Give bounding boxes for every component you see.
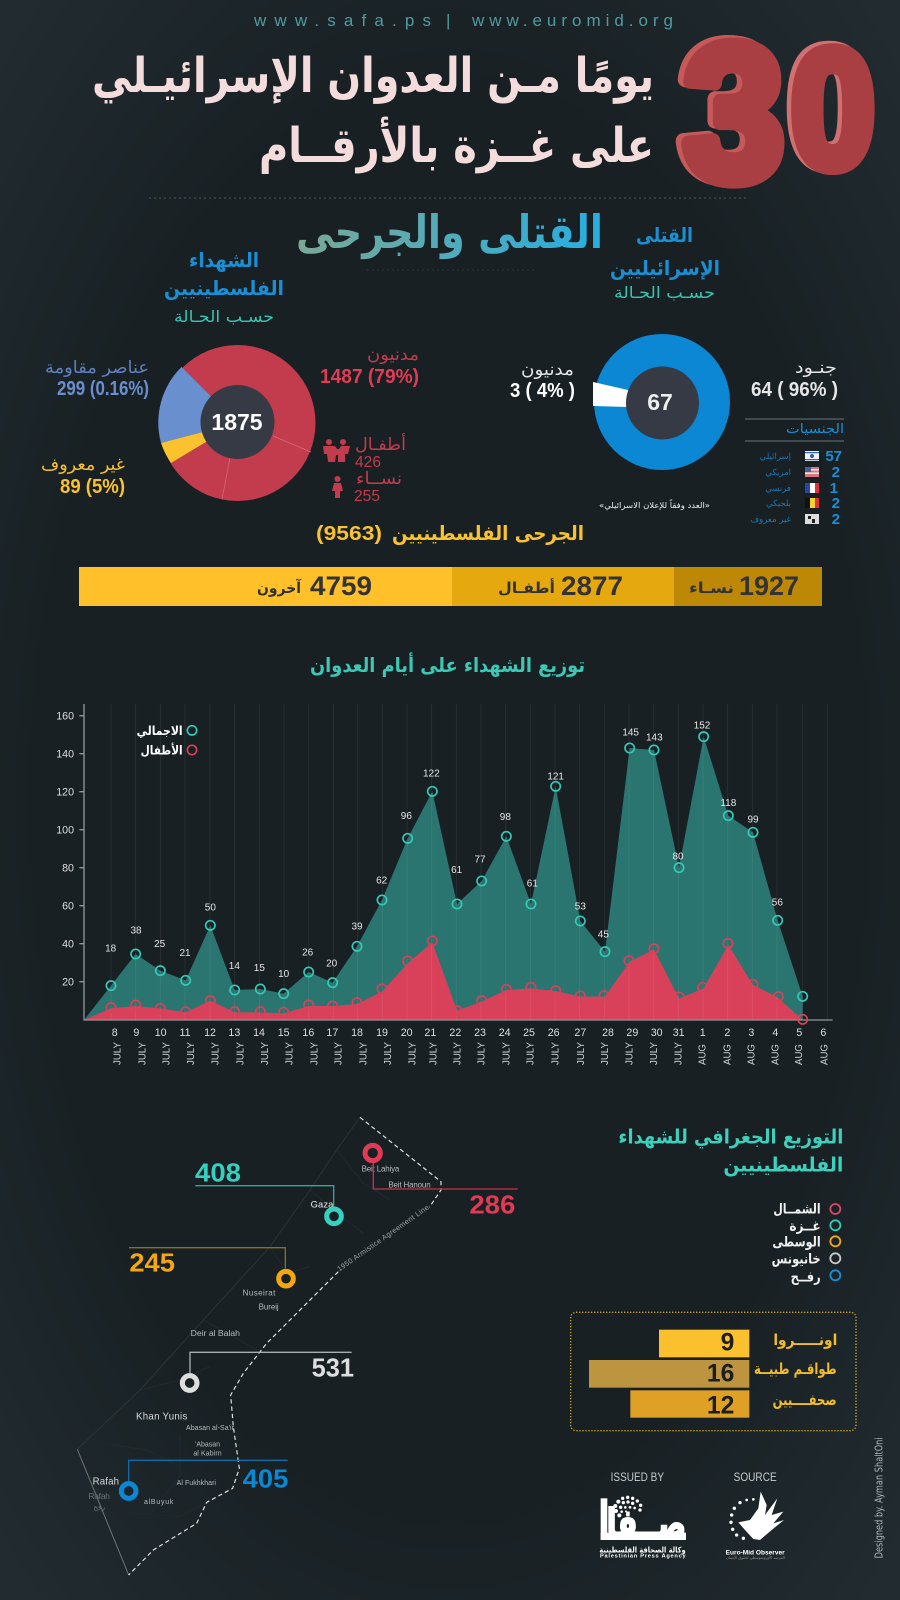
map place names: Beit Hanoun xyxy=(388,1180,431,1189)
map legend: رفــح xyxy=(791,1270,821,1286)
map section heading: الفلسطينيين xyxy=(723,1153,843,1177)
map section heading: التوزيع الجغرافي للشهداء xyxy=(618,1124,843,1149)
panel: UNRWA, medics, journalists: صحفــــيين xyxy=(773,1391,837,1409)
x axis day labels: 23 xyxy=(474,1027,486,1039)
map legend: الوسطى xyxy=(772,1235,821,1251)
label: soldiers xyxy=(751,358,838,401)
x axis day labels: 22 xyxy=(449,1027,461,1039)
label: civilians: 3 ( 4% ) xyxy=(510,380,575,402)
x axis month labels: AUG xyxy=(820,1044,831,1065)
value labels: 56 xyxy=(772,898,783,909)
value labels: 77 xyxy=(474,854,486,865)
value labels: 15 xyxy=(254,963,265,974)
x axis day labels: 18 xyxy=(351,1027,363,1039)
panel: UNRWA, medics, journalists: طواقـم طبيــة xyxy=(754,1360,837,1378)
nationalities table: 2 xyxy=(832,464,840,481)
nationalities table: الجنسيات xyxy=(786,422,844,437)
y axis labels: 80 xyxy=(62,863,74,875)
stacked bar: wounded: 2877 xyxy=(561,571,623,601)
heading: Palestinian martyrs: الفلسطينيين xyxy=(164,276,284,300)
value labels xyxy=(105,720,783,980)
marker: Gaza xyxy=(195,1158,341,1224)
y axis labels: 160 xyxy=(56,711,74,723)
panel: UNRWA, medics, journalists: 12 xyxy=(707,1392,734,1419)
x axis day labels: 19 xyxy=(376,1027,388,1039)
right column xyxy=(571,1124,885,1561)
label: civilians: 1487 (79%) xyxy=(320,366,419,388)
x axis month labels: JULY xyxy=(211,1042,222,1065)
note: per Israeli announcement: «العدد وفقاً للإعلان الاسرائيلي» xyxy=(599,499,710,511)
x axis day labels: 1 xyxy=(700,1027,706,1039)
total area xyxy=(84,737,803,1020)
logo: Safa: Palestinian Press Agency xyxy=(600,1554,687,1560)
nationalities table: فرنسي xyxy=(765,484,791,494)
map place names: alBuyuk xyxy=(144,1499,174,1506)
label: resistance: 299 (0.16%) xyxy=(57,378,149,400)
icon: Israel flag xyxy=(805,451,819,461)
x axis month labels: JULY xyxy=(526,1042,537,1065)
x axis month labels: JULY xyxy=(334,1042,345,1065)
x axis day labels: 9 xyxy=(133,1027,139,1039)
map place names: Abasan al-Sa'ir xyxy=(186,1425,235,1432)
marker: Khan Yunis xyxy=(182,1352,354,1390)
designer credit: Designed by. Ayman ShaltOni xyxy=(872,1437,885,1558)
big number 30: 0 xyxy=(787,13,871,201)
x axis day labels xyxy=(112,1027,826,1039)
map legend: الشمــال xyxy=(773,1201,821,1217)
x axis day labels: 10 xyxy=(155,1027,167,1039)
value labels: 14 xyxy=(229,961,240,972)
x axis month labels: JULY xyxy=(673,1042,684,1065)
logo: Safa: وكالة الصحافة الفلسطينية xyxy=(599,1546,686,1555)
x axis day labels: 20 xyxy=(401,1027,413,1039)
map place names: رفح xyxy=(93,1502,105,1511)
x axis day labels: 6 xyxy=(820,1027,826,1039)
axes xyxy=(79,704,833,1021)
value labels: 18 xyxy=(105,944,117,955)
x axis month labels: AUG xyxy=(722,1044,733,1065)
x axis day labels: 21 xyxy=(424,1027,436,1039)
label: civilians xyxy=(320,345,419,388)
value labels: 26 xyxy=(302,947,314,958)
value labels: 53 xyxy=(575,902,586,913)
x axis day labels: 5 xyxy=(796,1027,802,1039)
y axis labels: 40 xyxy=(62,939,74,951)
x axis month labels: JULY xyxy=(358,1042,369,1065)
x axis month labels: JULY xyxy=(383,1042,394,1065)
x axis month labels: JULY xyxy=(625,1042,636,1065)
logo: Euro-Mid Observer: Euro-Mid Observer xyxy=(726,1549,785,1556)
value labels: 61 xyxy=(451,865,463,876)
map legend: غــزة xyxy=(789,1219,821,1235)
title xyxy=(92,48,654,174)
map place names: Deir al Balah xyxy=(191,1328,240,1338)
coastline xyxy=(77,1117,360,1449)
nationalities table: 2 xyxy=(832,511,840,528)
x axis day labels: 26 xyxy=(548,1027,560,1039)
heading: Palestinian martyrs: الشهداء xyxy=(189,248,259,272)
x axis month labels: JULY xyxy=(649,1042,660,1065)
label: women xyxy=(354,469,402,505)
x axis month labels: JULY xyxy=(501,1042,512,1065)
map place names: 1950 Armistice Agreement Line xyxy=(335,1203,431,1273)
value labels: 39 xyxy=(351,921,363,932)
x axis day labels: 28 xyxy=(602,1027,614,1039)
label: civilians xyxy=(510,360,575,402)
value labels: 80 xyxy=(672,851,684,862)
logo: Euro-Mid Observer xyxy=(726,1492,785,1561)
heading: Palestinian wounded xyxy=(316,521,584,545)
x axis month labels xyxy=(113,1042,831,1065)
value labels: 21 xyxy=(179,948,191,959)
chart heading: توزيع الشهداء على أيام العدوان xyxy=(310,651,585,677)
x axis day labels: 29 xyxy=(626,1027,638,1039)
x axis day labels: 2 xyxy=(724,1027,730,1039)
stacked bar: wounded: نسـاء xyxy=(689,579,734,597)
x axis day labels: 24 xyxy=(499,1027,511,1039)
marker: central xyxy=(129,1248,293,1286)
map section heading xyxy=(618,1124,843,1177)
label: soldiers: 64 ( 96% ) xyxy=(751,379,838,401)
x axis month labels: JULY xyxy=(576,1042,587,1065)
nationalities table: 1 xyxy=(830,480,838,497)
label: women: نســاء xyxy=(356,469,402,489)
heading: Palestinian martyrs: حسـب الحـالة xyxy=(174,307,274,326)
donut chart: Palestinian martyrs xyxy=(158,345,316,501)
map place names: Khan Yunis xyxy=(136,1411,188,1422)
value labels: 45 xyxy=(598,930,609,941)
panel: UNRWA, medics, journalists: 9 xyxy=(721,1330,734,1357)
section heading: dead and wounded: القتلى والجرحى xyxy=(296,205,603,259)
logo: Safa xyxy=(599,1496,687,1560)
area chart: daily martyrs xyxy=(56,704,833,1065)
label: unknown xyxy=(41,455,125,498)
legend: الأطفال xyxy=(141,742,183,757)
stacked bar: wounded xyxy=(79,567,822,606)
logo: Euro-Mid Observer: المرصد الأورومتوسطي لحقوق الإنسان xyxy=(726,1555,785,1561)
x axis day labels: 8 xyxy=(112,1027,118,1039)
heading: Palestinian martyrs xyxy=(164,248,284,326)
value labels: 118 xyxy=(720,798,737,809)
y axis labels: 140 xyxy=(56,749,74,761)
label: children: 426 xyxy=(355,454,381,471)
x axis day labels: 13 xyxy=(228,1027,240,1039)
title: على غــزة بالأرقــام xyxy=(259,116,654,174)
x axis day labels: 11 xyxy=(179,1027,191,1039)
big number 30: 3 xyxy=(684,5,784,220)
label: resistance xyxy=(45,358,149,400)
x axis month labels: JULY xyxy=(477,1042,488,1065)
x axis month labels: AUG xyxy=(746,1044,757,1065)
value labels: 99 xyxy=(747,815,759,826)
marker: Gaza: 408 xyxy=(195,1158,241,1188)
panel: UNRWA, medics, journalists: اونـــــروا xyxy=(773,1331,837,1349)
donut chart: Palestinian martyrs: 1875 xyxy=(211,409,263,435)
panel: UNRWA, medics, journalists xyxy=(571,1312,856,1431)
website links: | xyxy=(446,11,450,30)
value labels: 143 xyxy=(646,733,663,744)
y axis labels xyxy=(56,711,74,989)
value labels: 25 xyxy=(154,939,166,950)
x axis month labels: AUG xyxy=(771,1044,782,1065)
x axis month labels: JULY xyxy=(285,1042,296,1065)
value labels: 96 xyxy=(401,811,412,822)
label: civilians: مدنيون xyxy=(521,360,574,380)
x axis month labels: JULY xyxy=(309,1042,320,1065)
nationalities table: 57 xyxy=(825,448,842,465)
icon: France flag xyxy=(805,483,819,493)
value labels: 98 xyxy=(500,812,511,823)
legend: الاجمالي xyxy=(137,723,183,738)
stacked bar: wounded: 4759 xyxy=(310,571,372,601)
x axis day labels: 17 xyxy=(326,1027,338,1039)
logo: Safa: صــفا xyxy=(607,1501,686,1547)
icon: woman xyxy=(332,476,343,498)
stacked bar: wounded: آخرون xyxy=(257,579,302,597)
value labels: 121 xyxy=(547,771,564,782)
label: unknown: 89 (5%) xyxy=(60,476,125,498)
map of Gaza Strip xyxy=(77,1117,518,1575)
marker: Rafah xyxy=(121,1460,288,1498)
x axis day labels: 16 xyxy=(302,1027,314,1039)
map place names: al Kabirn xyxy=(193,1450,222,1457)
armistice line xyxy=(129,1117,441,1575)
map legend xyxy=(772,1201,840,1286)
map place names: Nuseirat xyxy=(243,1288,276,1297)
value labels: 122 xyxy=(423,769,440,780)
legend xyxy=(137,723,197,757)
y axis labels: 60 xyxy=(62,901,74,913)
heading: Israeli dead: حسـب الحـالة xyxy=(614,283,715,302)
big number 30: 3 xyxy=(679,3,779,218)
credit: source: SOURCE xyxy=(734,1470,777,1484)
value labels: 10 xyxy=(278,969,290,980)
y axis labels: 20 xyxy=(62,977,74,989)
marker: Khan Yunis: 531 xyxy=(312,1353,354,1383)
heading: Palestinian wounded: (9563) xyxy=(316,523,382,545)
nationalities table: امريكي xyxy=(765,468,791,478)
value labels: 145 xyxy=(622,727,639,738)
x axis day labels: 12 xyxy=(204,1027,216,1039)
nationalities table xyxy=(745,419,844,528)
website links: www.euromid.org xyxy=(471,11,673,30)
value labels: 50 xyxy=(205,902,216,913)
map place names: Gaza xyxy=(311,1199,334,1209)
marker: north xyxy=(365,1145,518,1219)
y axis labels: 120 xyxy=(56,787,74,799)
map place names xyxy=(88,1165,431,1511)
icon: Belgium flag xyxy=(805,498,819,508)
x axis day labels: 4 xyxy=(772,1027,778,1039)
x axis month labels: JULY xyxy=(186,1042,197,1065)
label: resistance: عناصر مقاومة xyxy=(45,358,149,378)
label: children xyxy=(355,433,406,471)
x axis month labels: JULY xyxy=(162,1042,173,1065)
x axis day labels: 31 xyxy=(673,1027,685,1039)
map place names: Beit Lahiya xyxy=(362,1165,400,1174)
x axis day labels: 30 xyxy=(651,1027,663,1039)
stacked bar: wounded: 1927 xyxy=(739,571,799,601)
y axis labels: 100 xyxy=(56,825,74,837)
x axis month labels: JULY xyxy=(260,1042,271,1065)
icon: unknown flag xyxy=(805,514,819,524)
donut chart: Israeli dead: 67 xyxy=(647,389,673,415)
total markers xyxy=(106,732,807,1001)
value labels: 38 xyxy=(130,925,142,936)
x axis month labels: AUG xyxy=(794,1044,805,1065)
stacked bar: wounded: أطفـال xyxy=(498,578,555,597)
x axis day labels: 27 xyxy=(574,1027,586,1039)
label: women: 255 xyxy=(354,488,380,505)
value labels: 62 xyxy=(376,875,388,886)
x axis month labels: JULY xyxy=(550,1042,561,1065)
label: civilians: مدنيون xyxy=(367,345,419,365)
nationalities table: غير معروف xyxy=(750,515,792,525)
heading: Palestinian wounded: الجرحى الفلسطينيين xyxy=(392,521,584,545)
x axis day labels: 14 xyxy=(253,1027,265,1039)
x axis day labels: 25 xyxy=(523,1027,535,1039)
x axis month labels: JULY xyxy=(113,1042,124,1065)
map place names: Rafah xyxy=(93,1476,119,1487)
icon: US flag xyxy=(805,467,819,477)
website links xyxy=(253,11,673,30)
big number 30 xyxy=(679,3,875,220)
x axis day labels: 15 xyxy=(278,1027,290,1039)
map place names: 'Abasan xyxy=(195,1442,220,1449)
x axis month labels: JULY xyxy=(408,1042,419,1065)
x axis month labels: JULY xyxy=(137,1042,148,1065)
donut chart: Israeli dead xyxy=(593,334,730,470)
map legend: خانيونس xyxy=(772,1251,821,1267)
heading: Israeli dead: الإسرائيليين xyxy=(610,256,720,280)
x axis month labels: AUG xyxy=(697,1044,708,1065)
big number 30: 0 xyxy=(791,15,875,203)
panel: UNRWA, medics, journalists: 16 xyxy=(707,1361,734,1388)
website links: www.safa.ps xyxy=(253,11,431,30)
credit: issued by: ISSUED BY xyxy=(611,1470,664,1484)
x axis day labels: 3 xyxy=(748,1027,754,1039)
x axis month labels: JULY xyxy=(235,1042,246,1065)
value labels: 20 xyxy=(326,958,338,969)
heading: Israeli dead xyxy=(610,223,720,302)
map place names: Rafah xyxy=(88,1491,110,1501)
map streets xyxy=(103,1150,390,1517)
nationalities table: بلجيكي xyxy=(766,499,791,509)
value labels: 152 xyxy=(694,720,711,731)
children area xyxy=(84,942,803,1020)
label: unknown: غير معروف xyxy=(41,455,125,475)
title: يومًا مـن العدوان الإسرائيـلي xyxy=(92,48,654,104)
icon: children xyxy=(323,439,350,462)
x axis month labels: JULY xyxy=(600,1042,611,1065)
nationalities table: 2 xyxy=(832,495,840,512)
label: children: أطفـال xyxy=(355,433,406,455)
x axis month labels: JULY xyxy=(429,1042,440,1065)
heading: Israeli dead: القتلى xyxy=(636,223,693,247)
value labels: 61 xyxy=(527,879,538,890)
marker: north: 286 xyxy=(469,1189,515,1219)
map place names: Bureij xyxy=(259,1302,279,1311)
marker: central: 245 xyxy=(129,1248,175,1278)
children markers xyxy=(106,936,807,1024)
label: soldiers: جنـود xyxy=(795,358,837,378)
nationalities table: إسرائيلي xyxy=(760,452,791,462)
x axis month labels: JULY xyxy=(452,1042,463,1065)
map place names: Al Fukhkhari xyxy=(177,1480,216,1487)
marker: Rafah: 405 xyxy=(243,1463,288,1493)
